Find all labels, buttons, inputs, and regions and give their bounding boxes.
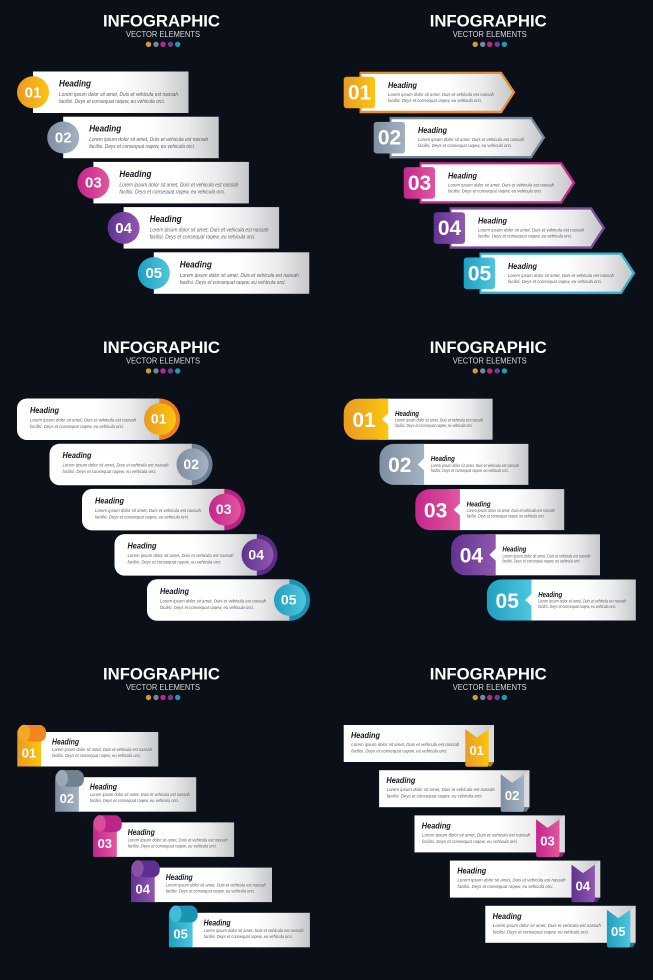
step 04: facilisi. Deys et consequat raqew, eu vehicula orci. <box>166 889 255 894</box>
title: INFOGRAPHIC <box>103 12 220 30</box>
panel: top right arrows <box>344 12 635 294</box>
step 04: 04 <box>460 545 483 568</box>
step 03: Heading <box>467 499 491 508</box>
step 05: facilisi. Deys et consequat raqew, eu vehicula orci. <box>180 280 286 286</box>
step 02: 02 <box>60 791 74 806</box>
step 01 <box>17 72 188 113</box>
step 01: Lorem ipsum dolor sit amet, Duis et vehicula est nassah <box>52 747 152 752</box>
step 04: 04 <box>248 546 264 562</box>
step 04: 04 <box>135 881 151 896</box>
step 03: Lorem ipsum dolor sit amet, Duis et vehicula est nassah <box>422 832 530 837</box>
step 05: 05 <box>611 924 626 939</box>
step 02: Lorem ipsum dolor sit amet, Duis et vehicula est nassah <box>89 137 208 143</box>
step 02 <box>379 770 529 812</box>
step 03 <box>404 162 575 204</box>
title: INFOGRAPHIC <box>430 665 547 684</box>
step 03: 03 <box>216 501 232 517</box>
step 01: Lorem ipsum dolor sit amet, Duis et vehicula est nassah <box>59 92 178 98</box>
step 03: Lorem ipsum dolor sit amet, Duis et vehicula est nassah <box>95 508 201 513</box>
step 01: Heading <box>395 409 420 418</box>
step 01: 01 <box>352 409 376 432</box>
step 01: Heading <box>30 405 59 415</box>
step 02 <box>47 117 219 158</box>
step 03 <box>414 815 565 857</box>
step 03: 03 <box>540 833 555 848</box>
step 04: facilisi. Deys et consequat raqew, eu vehicula orci. <box>457 884 553 889</box>
step 01 <box>17 725 158 766</box>
step 01: facilisi. Deys et consequat raqew, eu vehicula orci. <box>59 99 165 105</box>
step 04: facilisi. Deys et consequat raqew, eu vehicula orci. <box>478 234 572 239</box>
step 04: Lorem ipsum dolor sit amet, Duis et vehicula est nassah <box>478 228 584 233</box>
step 04: Heading <box>457 866 486 876</box>
step 04: Lorem ipsum dolor sit amet, Duis et vehicula est nassah <box>150 228 269 234</box>
step 03: Heading <box>448 170 477 180</box>
title: INFOGRAPHIC <box>103 665 220 684</box>
title <box>103 12 220 47</box>
step 04: 04 <box>438 217 461 240</box>
step 01: facilisi. Deys et consequat raqew, eu vehicula orci. <box>351 748 447 754</box>
step 04: 04 <box>576 879 591 894</box>
title <box>430 12 547 47</box>
step 02: facilisi. Deys et consequat raqew, eu vehicula orci. <box>431 468 509 473</box>
step 04 <box>434 207 605 249</box>
step 01: Heading <box>59 78 92 88</box>
step 05: facilisi. Deys et consequat raqew, eu vehicula orci. <box>493 929 589 934</box>
panel: bottom left scrolls <box>17 665 310 947</box>
step 02: 02 <box>55 130 72 147</box>
title: VECTOR ELEMENTS <box>126 29 200 39</box>
step 01: 01 <box>25 84 41 101</box>
step 04: facilisi. Deys et consequat raqew, eu vehicula orci. <box>128 560 222 565</box>
step 01: 01 <box>348 82 371 104</box>
step 05: facilisi. Deys et consequat raqew, eu vehicula orci. <box>508 279 602 284</box>
step 01 <box>17 398 180 440</box>
step 01 <box>344 399 493 440</box>
step 02 <box>50 444 213 485</box>
step 04: Lorem ipsum dolor sit amet, Duis et vehicula est nassah <box>502 553 591 558</box>
step 05: Heading <box>180 259 212 269</box>
step 05: 05 <box>145 265 162 282</box>
step 05 <box>485 906 636 948</box>
step 05 <box>487 580 636 620</box>
step 03: Lorem ipsum dolor sit amet, Duis et vehicula est nassah <box>448 182 554 187</box>
step 04 <box>131 860 272 902</box>
step 01: facilisi. Deys et consequat raqew, eu vehicula orci. <box>30 424 124 429</box>
step 02: Lorem ipsum dolor sit amet, Duis et vehicula est nassah <box>418 137 524 142</box>
step 03: Heading <box>422 820 451 830</box>
step 02 <box>55 770 196 812</box>
step 04: Lorem ipsum dolor sit amet, Duis et vehicula est nassah <box>457 878 566 883</box>
step 02: Heading <box>62 450 92 460</box>
step 04: facilisi. Deys et consequat raqew, eu vehicula orci. <box>502 559 580 564</box>
step 03: Lorem ipsum dolor sit amet, Duis et vehicula est nassah <box>119 182 239 188</box>
step 04: 04 <box>115 220 133 237</box>
title: VECTOR ELEMENTS <box>126 356 200 366</box>
step 05: Lorem ipsum dolor sit amet, Duis et vehicula est nassah <box>538 599 627 604</box>
step 05 <box>147 579 310 621</box>
step 04: facilisi. Deys et consequat raqew, eu vehicula orci. <box>150 235 256 241</box>
step 01: Lorem ipsum dolor sit amet, Duis et vehicula est nassah <box>395 418 484 423</box>
step 05: Lorem ipsum dolor sit amet, Duis et vehicula est nassah <box>204 928 304 933</box>
step 01: Lorem ipsum dolor sit amet, Duis et vehicula est nassah <box>351 742 460 747</box>
title <box>103 665 220 700</box>
step 03: 03 <box>98 836 112 851</box>
step 02 <box>374 117 545 158</box>
step 04 <box>450 861 600 902</box>
title: VECTOR ELEMENTS <box>126 682 200 692</box>
step 01: 01 <box>469 743 484 758</box>
step 02: facilisi. Deys et consequat raqew, eu vehicula orci. <box>89 144 195 150</box>
title <box>430 338 547 374</box>
step 05: 05 <box>281 592 297 608</box>
step 05 <box>464 252 635 294</box>
step 03: 03 <box>408 172 431 195</box>
step 01: 01 <box>22 746 36 761</box>
step 04: Lorem ipsum dolor sit amet, Duis et vehicula est nassah <box>128 553 234 558</box>
title: INFOGRAPHIC <box>430 338 547 357</box>
step 03: facilisi. Deys et consequat raqew, eu vehicula orci. <box>422 839 518 844</box>
step 03: 03 <box>424 499 447 522</box>
step 02: 02 <box>505 788 519 803</box>
step 05: facilisi. Deys et consequat raqew, eu vehicula orci. <box>204 934 293 939</box>
step 03: Heading <box>95 495 124 505</box>
step 01 <box>344 72 515 113</box>
step 03: Heading <box>128 828 155 837</box>
step 03: facilisi. Deys et consequat raqew, eu vehicula orci. <box>128 843 217 848</box>
title <box>103 338 220 374</box>
step 05: facilisi. Deys et consequat raqew, eu vehicula orci. <box>160 605 254 610</box>
panel: middle right tabs <box>344 338 636 620</box>
step 02: Heading <box>89 124 122 134</box>
step 05: Heading <box>538 590 563 599</box>
step 04: Heading <box>478 216 507 226</box>
step 01: Lorem ipsum dolor sit amet, Duis et vehicula est nassah <box>388 92 494 97</box>
step 02: facilisi. Deys et consequat raqew, eu vehicula orci. <box>90 798 179 803</box>
step 03 <box>82 489 245 530</box>
step 01: Heading <box>52 738 79 746</box>
title: VECTOR ELEMENTS <box>453 356 527 366</box>
step 05: Lorem ipsum dolor sit amet, Duis et vehicula est nassah <box>493 923 601 928</box>
step 03: Lorem ipsum dolor sit amet, Duis et vehicula est nassah <box>467 508 555 513</box>
step 02: facilisi. Deys et consequat raqew, eu vehicula orci. <box>418 143 512 148</box>
step 01 <box>344 725 494 767</box>
step 04 <box>451 534 600 575</box>
step 01: Lorem ipsum dolor sit amet, Duis et vehicula est nassah <box>30 418 136 422</box>
step 05: Heading <box>508 261 537 271</box>
step 05 <box>169 906 310 947</box>
panel: top left circles <box>17 12 309 294</box>
step 05: Lorem ipsum dolor sit amet, Duis et vehicula est nassah <box>508 273 614 278</box>
step 05: Heading <box>493 911 522 921</box>
panel: middle left pills <box>17 338 310 621</box>
step 01: facilisi. Deys et consequat raqew, eu vehicula orci. <box>395 423 473 428</box>
step 04 <box>114 534 278 576</box>
step 01: Heading <box>351 730 380 740</box>
step 02: Heading <box>90 783 117 792</box>
step 01: Heading <box>388 80 417 90</box>
title: INFOGRAPHIC <box>430 12 547 30</box>
step 05: Lorem ipsum dolor sit amet, Duis et vehicula est nassah <box>160 598 266 603</box>
title: VECTOR ELEMENTS <box>453 29 527 39</box>
step 02: Lorem ipsum dolor sit amet, Duis et vehicula est nassah <box>431 463 519 468</box>
step 02: Lorem ipsum dolor sit amet, Duis et vehicula est nassah <box>90 792 190 797</box>
step 04: Heading <box>502 545 527 554</box>
step 01: 01 <box>151 411 167 427</box>
step 02: Heading <box>418 125 447 135</box>
step 04: Heading <box>150 214 182 224</box>
step 05: Heading <box>204 918 231 927</box>
step 03: facilisi. Deys et consequat raqew, eu vehicula orci. <box>119 189 225 195</box>
step 02: Lorem ipsum dolor sit amet, Duis et vehicula est nassah <box>62 463 169 468</box>
step 03: facilisi. Deys et consequat raqew, eu vehicula orci. <box>95 514 189 519</box>
step 04: Lorem ipsum dolor sit amet, Duis et vehicula est nassah <box>166 883 266 888</box>
step 04 <box>108 207 279 249</box>
step 01: facilisi. Deys et consequat raqew, eu vehicula orci. <box>52 753 141 758</box>
step 03 <box>415 489 564 530</box>
step 03 <box>77 162 249 203</box>
step 02 <box>380 444 528 485</box>
step 03: facilisi. Deys et consequat raqew, eu vehicula orci. <box>448 188 542 193</box>
step 02: Lorem ipsum dolor sit amet, Duis et vehicula est nassah <box>387 787 495 792</box>
step 02: 02 <box>388 454 411 477</box>
step 03 <box>93 815 234 857</box>
step 05 <box>138 252 309 294</box>
step 05: 05 <box>468 262 491 285</box>
step 04: Heading <box>128 541 156 551</box>
step 02: 02 <box>183 456 199 472</box>
step 01: facilisi. Deys et consequat raqew, eu vehicula orci. <box>388 98 482 103</box>
title <box>430 665 547 700</box>
step 05: 05 <box>496 590 519 613</box>
step 02: Heading <box>386 775 415 785</box>
step 02: 02 <box>378 127 401 150</box>
title: VECTOR ELEMENTS <box>453 682 527 692</box>
step 05: 05 <box>173 927 188 942</box>
step 02: facilisi. Deys et consequat raqew, eu vehicula orci. <box>62 469 156 474</box>
step 05: Heading <box>160 586 189 596</box>
step 03: facilisi. Deys et consequat raqew, eu vehicula orci. <box>467 513 545 518</box>
step 03: Lorem ipsum dolor sit amet, Duis et vehicula est nassah <box>128 837 228 842</box>
step 03: Heading <box>119 169 152 179</box>
step 02: Heading <box>431 454 455 463</box>
step 05: facilisi. Deys et consequat raqew, eu vehicula orci. <box>538 604 616 609</box>
step 02: facilisi. Deys et consequat raqew, eu vehicula orci. <box>387 794 483 799</box>
step 05: Lorem ipsum dolor sit amet, Duis et vehicula est nassah <box>180 273 299 279</box>
step 04: Heading <box>166 873 193 882</box>
title: INFOGRAPHIC <box>103 338 220 357</box>
step 03: 03 <box>85 175 102 192</box>
panel: bottom right bookmarks <box>344 665 636 948</box>
